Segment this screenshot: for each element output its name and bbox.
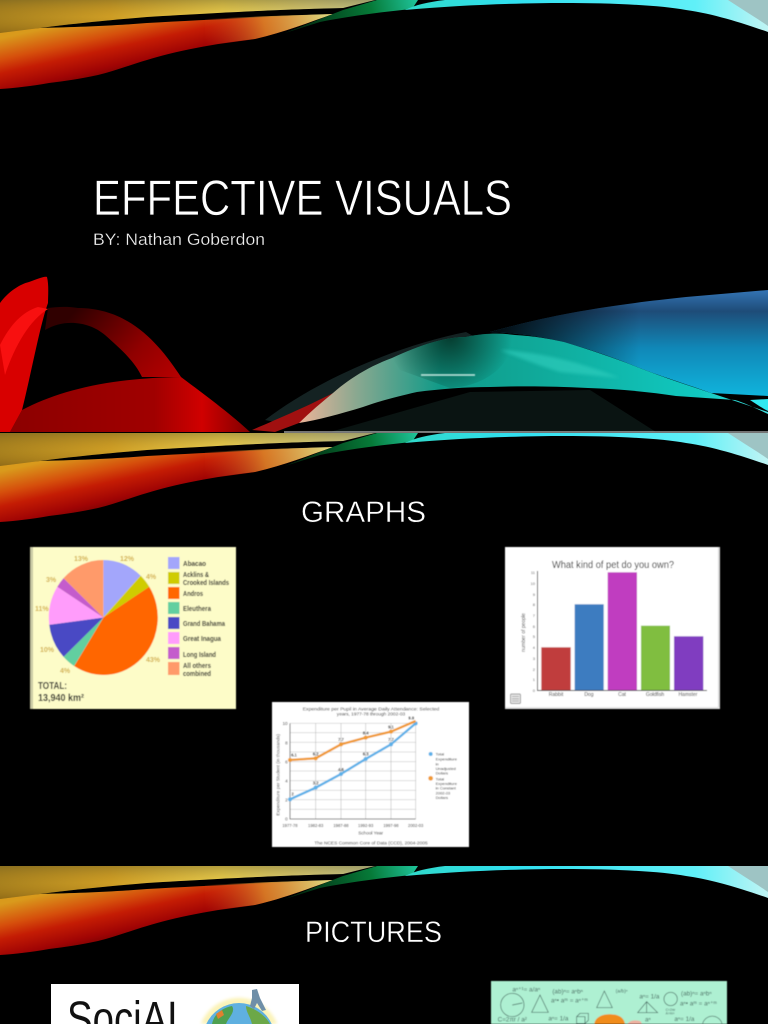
icon: globe with climbing figure — [200, 989, 278, 1024]
line series: unadjusted dollars: 7.7 — [388, 737, 395, 742]
decorative header swoosh: slide 3 — [0, 866, 768, 955]
pie legend: Grand Bahama — [183, 619, 226, 628]
bar chart axes: Hamster — [679, 692, 698, 698]
bar chart axes: 0 — [533, 688, 536, 693]
line chart axis labels: 1997-98 — [383, 823, 399, 828]
geometry sketches — [501, 991, 722, 1024]
pie percentage labels: 13% — [74, 556, 89, 563]
line series: unadjusted dollars — [288, 721, 418, 801]
line chart axis labels: 1992-93 — [358, 823, 374, 828]
formula text: C=2πr — [666, 1008, 676, 1012]
icon: menu button — [510, 694, 520, 704]
formula text — [498, 987, 717, 1023]
bar chart axes: 4 — [533, 645, 536, 650]
line series: constant dollars: 6.1 — [291, 753, 298, 758]
pie percentage labels: 12% — [120, 556, 135, 563]
pie legend: combined — [183, 669, 211, 678]
line series: unadjusted dollars: 6.3 — [363, 752, 369, 757]
bar chart axes: 9 — [533, 592, 536, 597]
bar chart axes: number of people — [521, 613, 527, 652]
line series: constant dollars — [288, 716, 416, 762]
bar chart axes: 2 — [533, 667, 536, 672]
line chart axis labels: 8 — [285, 740, 288, 745]
heading: pictures: PICTURES — [305, 916, 442, 949]
line chart legend: in — [436, 761, 439, 766]
line series: constant dollars: 9.9 — [408, 716, 415, 721]
line chart axis labels: School Year — [358, 831, 384, 836]
line chart title: Expenditure per Pupil in Average Daily Attendance: Selected — [303, 706, 440, 711]
line chart axis labels: 2 — [285, 797, 288, 802]
bars — [541, 572, 703, 690]
line chart legend: in Constant — [436, 786, 457, 791]
bar chart axes — [521, 570, 707, 698]
line chart axis labels: 1987-88 — [333, 823, 349, 828]
line chart axis labels: 2002-03 — [408, 823, 424, 828]
line series: constant dollars: 9.1 — [388, 724, 395, 729]
line series: constant dollars: 8.4 — [363, 731, 369, 736]
bar chart axes: 10 — [531, 581, 536, 586]
pie percentage labels: 10% — [40, 647, 55, 654]
pie legend: Acklins & — [183, 570, 210, 579]
picture: social studies logo with globe — [51, 984, 299, 1024]
decorative header swoosh: slide 1 — [0, 0, 768, 89]
title: EFFECTIVE VISUALS — [93, 170, 512, 226]
line chart axis labels: 10 — [282, 721, 288, 726]
line chart title: years, 1977-78 through 2002-03 — [337, 712, 406, 717]
line chart axis labels: 4 — [285, 778, 288, 783]
subtitle: byline: BY: Nathan Goberdon — [93, 230, 265, 249]
panel: pie chart of land area — [30, 547, 236, 709]
pie percentage labels: 4% — [60, 668, 71, 675]
line chart axis labels: 1982-83 — [308, 823, 324, 828]
bar chart axes: Goldfish — [646, 692, 664, 698]
pie legend: Eleuthera — [183, 604, 212, 613]
bar chart axes: 6 — [533, 624, 536, 629]
bar chart axes: Cat — [618, 692, 627, 698]
pie percentage labels: 3% — [46, 577, 57, 584]
line series: unadjusted dollars: 2 — [292, 792, 295, 797]
bar chart axes: 3 — [533, 656, 536, 661]
formula text: aⁿ• aᵐ = aⁿ⁺ᵐ — [551, 998, 588, 1005]
line chart legend: Expenditure — [436, 781, 458, 786]
formula text: aⁿ — [645, 1016, 651, 1023]
bar chart axes: Rabbit — [549, 692, 564, 698]
line series: unadjusted dollars: 3.2 — [313, 780, 319, 785]
pie legend: Great Inagua — [183, 634, 222, 643]
formula text: aⁿ= 1/a — [548, 1015, 569, 1022]
formula text: aⁿ= 1/a — [674, 1016, 695, 1023]
pie legend: Andros — [183, 589, 203, 598]
line chart axis labels: Expenditure per Student (in thousands) — [275, 733, 280, 816]
character hair and hand — [594, 1014, 625, 1024]
line chart grid and axes — [290, 723, 416, 819]
bar chart axes: Dog — [584, 692, 594, 698]
pie legend: Crooked Islands — [183, 578, 229, 587]
line chart axis labels: The NCES Common Core of Data (CCD), 2004-2005 — [314, 841, 428, 846]
formula text: aⁿ= 1/a — [639, 993, 660, 1000]
decorative header swoosh: slide 2 — [0, 433, 768, 522]
line chart title — [303, 706, 440, 717]
pie legend: Long Island — [183, 650, 216, 659]
bar chart axes: 1 — [533, 677, 536, 682]
pie total: TOTAL: — [38, 680, 67, 692]
pie total: 13,940 km² — [38, 692, 84, 704]
heading: graphs: GRAPHS — [301, 496, 426, 529]
bar chart title: What kind of pet do you own? — [552, 560, 674, 571]
formula text: aⁿ⁺¹= a/aⁿ — [512, 987, 540, 994]
line chart axis labels — [275, 721, 428, 846]
line chart legend — [428, 751, 458, 800]
line chart axis labels: 6 — [285, 759, 288, 764]
picture: math formulas with character — [491, 981, 727, 1024]
bar chart axes: 7 — [533, 613, 536, 618]
line series: unadjusted dollars: 4.6 — [338, 767, 345, 772]
line chart legend: Total — [436, 776, 444, 781]
formula text: aⁿ• aᵐ = aⁿ⁺ᵐ — [680, 1001, 717, 1008]
formula text: (ab)ⁿ= aⁿbⁿ — [552, 988, 583, 995]
pie percentage labels: 4% — [146, 574, 157, 581]
line chart axis labels: 0 — [285, 817, 288, 822]
formula text: (ab)ⁿ= aⁿbⁿ — [681, 991, 712, 998]
line chart legend: Dollars — [436, 771, 448, 776]
formula text: A=πr² — [666, 1011, 675, 1015]
line chart axis labels: 1977-78 — [282, 823, 298, 828]
pie legend: Abacao — [183, 559, 206, 568]
line chart legend: Expenditure — [436, 757, 458, 762]
bar chart axes: 5 — [533, 634, 536, 639]
line chart legend: Unadjusted — [436, 766, 456, 771]
pie total — [38, 680, 84, 704]
line chart legend: Total — [436, 751, 444, 756]
pie percentage labels: 11% — [35, 606, 49, 613]
pie percentage labels — [35, 556, 161, 675]
bar chart axes: 11 — [531, 570, 536, 575]
line series: constant dollars: 6.2 — [313, 751, 319, 756]
line chart legend: 2002-03 — [436, 790, 451, 795]
formula text: C=2πr / a² — [498, 1016, 527, 1023]
pie legend: All others — [183, 661, 211, 670]
panel: line chart of expenditure — [272, 702, 469, 847]
pie percentage labels: 43% — [146, 657, 161, 664]
pie slices — [49, 560, 158, 675]
formula text: (a/b)ⁿ — [616, 988, 628, 994]
abstract ribbon artwork: slide 1 bottom — [0, 277, 768, 432]
bar chart axes: 8 — [533, 602, 536, 607]
panel: bar chart of pets — [505, 547, 720, 709]
pie legend — [168, 557, 229, 678]
line series: constant dollars: 7.7 — [338, 737, 345, 742]
line chart legend: Dollars — [436, 795, 448, 800]
